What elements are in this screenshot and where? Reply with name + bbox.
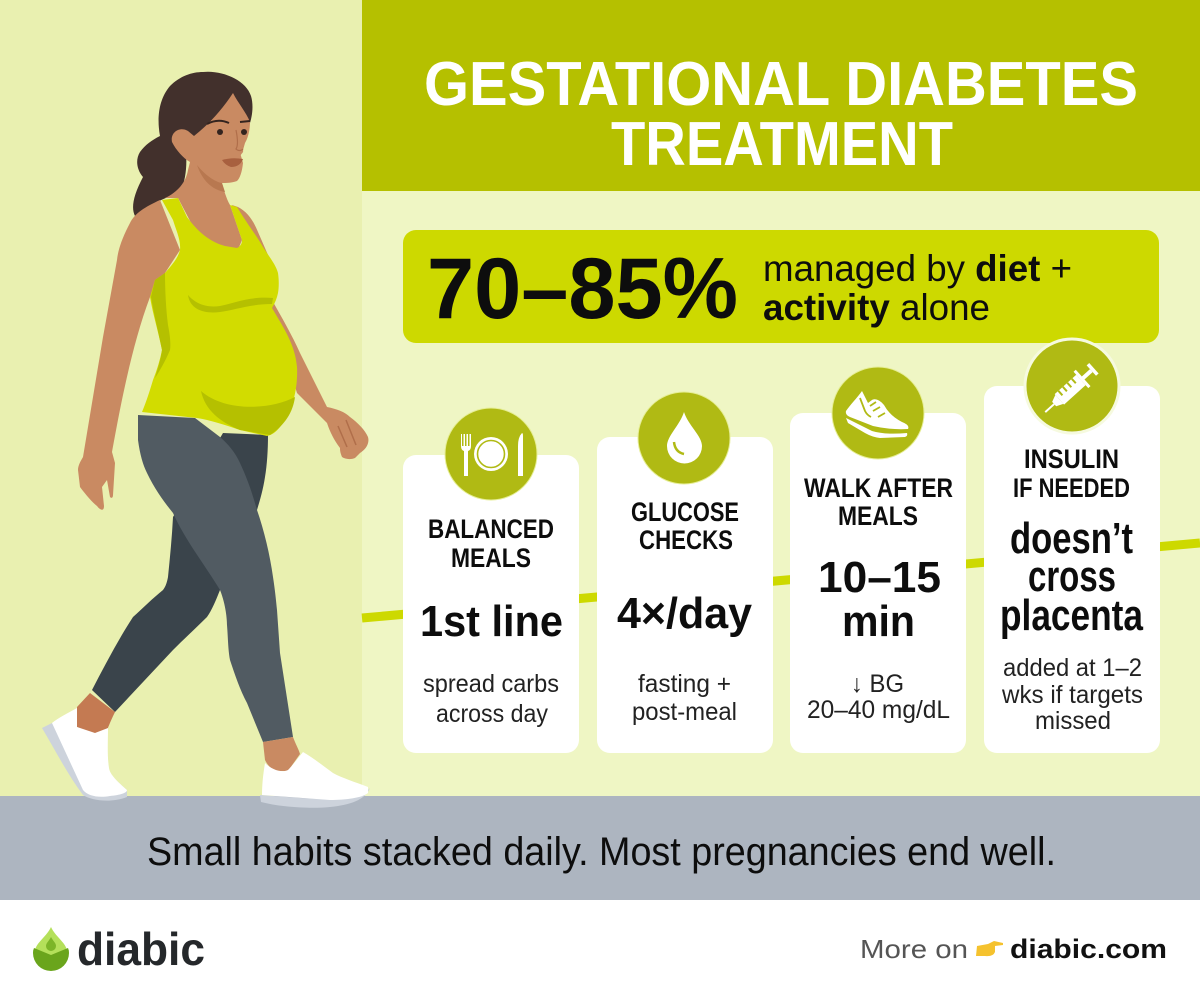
rising progress line bbox=[362, 543, 1200, 618]
facial features bbox=[207, 121, 250, 167]
front foot skin bbox=[263, 737, 300, 771]
hair and ponytail bbox=[133, 72, 252, 216]
icon: sneaker bbox=[832, 366, 924, 460]
statistic number: 70–85% bbox=[427, 241, 738, 337]
card note: added at 1–2 bbox=[1003, 654, 1142, 682]
panel: right background bbox=[362, 191, 1200, 796]
statistic description: managed by diet + bbox=[763, 248, 1072, 289]
title: GESTATIONAL DIABETES bbox=[424, 50, 1138, 119]
card heading: BALANCED bbox=[428, 514, 554, 544]
link: more on diabic.com: diabic.com bbox=[1010, 934, 1167, 964]
back foot skin bbox=[77, 693, 115, 735]
card note: fasting + bbox=[638, 670, 731, 698]
tank top shading bbox=[151, 273, 295, 435]
icon: syringe bbox=[1024, 338, 1120, 434]
card: balanced meals: across day bbox=[436, 700, 548, 728]
tagline: Small habits stacked daily. Most pregnancies end well. bbox=[147, 830, 1056, 874]
left arm and hand bbox=[78, 200, 180, 510]
link: more on diabic.com: More on bbox=[860, 934, 968, 964]
panel: left background bbox=[0, 0, 362, 796]
card: insulin if needed: IF NEEDED bbox=[1013, 473, 1130, 503]
card: insulin if needed: wks if targets bbox=[1001, 681, 1143, 709]
card: glucose checks: post-meal bbox=[632, 698, 737, 726]
card: insulin if needed: missed bbox=[1035, 707, 1111, 735]
card: walk after meals: 20–40 mg/dL bbox=[807, 696, 950, 724]
front leg bbox=[138, 415, 293, 742]
card heading: INSULIN bbox=[1024, 444, 1119, 474]
tank top bbox=[142, 198, 297, 436]
back shoe bbox=[42, 708, 127, 801]
card value: doesn’t bbox=[1010, 514, 1133, 563]
icon: logo drop bbox=[33, 927, 69, 971]
card: balanced meals bbox=[403, 408, 579, 753]
card heading: WALK AFTER bbox=[804, 473, 953, 503]
card note: spread carbs bbox=[423, 670, 559, 698]
icon: fork, plate and knife bbox=[444, 408, 538, 500]
card: walk after meals: MEALS bbox=[838, 501, 918, 531]
link: more on diabic.com bbox=[860, 934, 1167, 964]
card heading: GLUCOSE bbox=[631, 497, 739, 527]
callout: 70–85% statistic bbox=[403, 230, 1159, 343]
right arm bbox=[270, 300, 368, 459]
card: balanced meals: MEALS bbox=[451, 543, 531, 573]
back leg bbox=[92, 433, 268, 712]
illustration: pregnant woman walking bbox=[42, 72, 370, 808]
card: walk after meals bbox=[790, 366, 966, 753]
panel: footer bbox=[0, 900, 1200, 1000]
callout: 70–85% statistic: activity alone bbox=[763, 287, 990, 328]
card: insulin if needed bbox=[984, 338, 1160, 753]
neck, chest and face bbox=[165, 93, 250, 252]
neck shadow bbox=[197, 165, 225, 192]
icon: drop bbox=[638, 392, 730, 484]
card note: ↓ BG bbox=[851, 670, 904, 698]
logo: diabic bbox=[33, 923, 205, 975]
front shoe bbox=[260, 752, 370, 808]
panel: title banner bbox=[362, 0, 1200, 191]
card: insulin if needed: placenta bbox=[1000, 591, 1143, 640]
card: glucose checks: CHECKS bbox=[639, 525, 733, 555]
card value: 4×/day bbox=[617, 589, 753, 638]
icon: pointing hand bbox=[976, 941, 1003, 956]
card: glucose checks bbox=[597, 392, 773, 753]
card value: 10–15 bbox=[818, 553, 941, 602]
panel: tagline band bbox=[0, 796, 1200, 900]
card value: 1st line bbox=[420, 597, 563, 646]
right shoulder bbox=[232, 205, 268, 262]
title bbox=[424, 50, 1138, 179]
card: insulin if needed: cross bbox=[1028, 552, 1116, 601]
title: TREATMENT bbox=[611, 110, 953, 179]
wordmark: diabic bbox=[77, 923, 205, 975]
hand creases bbox=[338, 420, 356, 447]
card: walk after meals: min bbox=[842, 597, 915, 646]
